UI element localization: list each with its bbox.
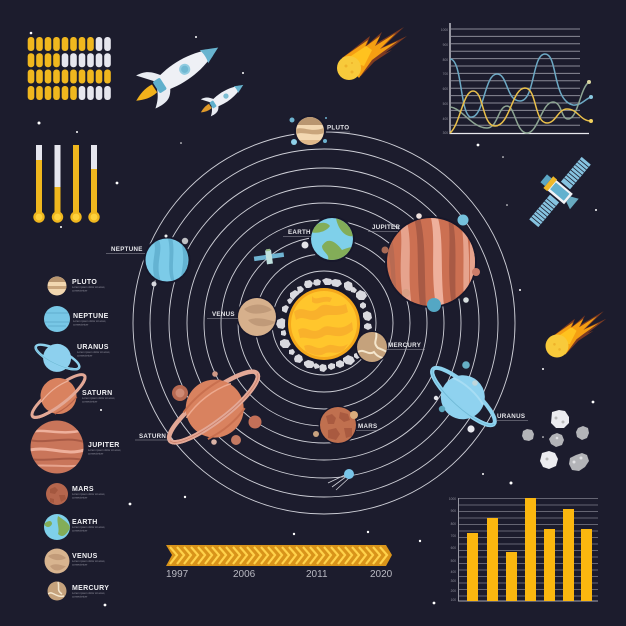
legend: saturn (21, 361, 115, 431)
legend: mars: Lorem ipsum dolor sit amet, (72, 492, 105, 496)
legend: mars: MARS (72, 486, 94, 493)
line chart: 400 (443, 117, 448, 121)
bar chart: 900 (451, 509, 456, 513)
icon: small rocket (195, 76, 248, 120)
line chart: 600 (443, 87, 448, 91)
planet: jupiter (382, 213, 480, 312)
bar chart: 600 (451, 546, 456, 550)
line chart: 1000 (441, 28, 448, 32)
bar chart: 1000 (449, 497, 456, 501)
bar chart: 700 (451, 534, 456, 538)
pictogram grid (28, 37, 111, 100)
line chart: 900 (443, 43, 448, 47)
legend: saturn: consectetuer (82, 400, 97, 404)
legend: venus: VENUS (72, 553, 98, 560)
label: venus (207, 311, 238, 318)
legend: venus: Lorem ipsum dolor sit amet, (72, 559, 105, 563)
timeline years: 2020 (370, 569, 393, 580)
bar chart: 300 (451, 579, 456, 583)
legend: jupiter: JUPITER (88, 442, 120, 449)
line chart: 300 (443, 131, 448, 135)
icon: comet top (337, 27, 407, 80)
legend: mars: consectetuer (72, 496, 87, 500)
legend: venus (44, 548, 105, 574)
label: saturn: SATURN (139, 433, 166, 440)
legend: saturn: Lorem ipsum dolor sit amet, (82, 396, 115, 400)
label: mercury: MERCURY (388, 342, 422, 349)
legend: saturn: SATURN (82, 390, 112, 397)
legend: earth (44, 514, 105, 540)
legend: mercury (48, 582, 109, 600)
label: mars: MARS (358, 423, 377, 430)
legend: uranus: URANUS (77, 344, 109, 351)
label: earth: EARTH (288, 229, 311, 236)
orbits (133, 132, 515, 514)
planet: mercury (356, 330, 388, 364)
planet: earth (302, 216, 355, 262)
asteroid belt (276, 278, 372, 372)
timeline years: 1997 (166, 569, 189, 580)
label: pluto: PLUTO (327, 124, 349, 132)
legend: neptune (44, 306, 109, 332)
planet: neptune (144, 234, 190, 286)
planet: venus (236, 296, 278, 338)
legend: mars (46, 483, 105, 505)
label: jupiter: JUPITER (372, 224, 400, 231)
legend: earth: Lorem ipsum dolor sit amet, (72, 525, 105, 529)
icon: satellite (517, 147, 601, 235)
line chart (441, 23, 593, 135)
timeline years: 2006 (233, 569, 256, 580)
timeline chevron arrow (166, 545, 392, 566)
legend: pluto: PLUTO (72, 279, 97, 286)
legend: venus: consectetuer (72, 562, 87, 566)
timeline years (166, 569, 393, 580)
legend: jupiter (30, 420, 121, 474)
line chart: 700 (443, 72, 448, 76)
timeline years: 2011 (306, 569, 328, 580)
legend: neptune: NEPTUNE (73, 313, 109, 320)
thermometer gauges (33, 145, 100, 223)
icon: comet right (546, 311, 606, 357)
legend: earth: EARTH (72, 519, 98, 526)
satellite: sputnik (328, 469, 354, 490)
legend: pluto: consectetuer (72, 288, 87, 292)
bar chart: 200 (451, 589, 456, 593)
planet: saturn (153, 352, 276, 465)
legend: mercury: consectetuer (72, 594, 87, 598)
icon: large rocket (125, 30, 228, 116)
legend: uranus: consectetuer (77, 354, 92, 358)
line chart: 500 (443, 102, 448, 106)
planet: mars (313, 406, 358, 444)
legend: mercury: MERCURY (72, 585, 109, 592)
legend: neptune: consectetuer (73, 322, 88, 326)
satellite: small (253, 247, 285, 266)
bar chart: 400 (451, 570, 456, 574)
icon: asteroids (522, 410, 589, 471)
legend: uranus (29, 335, 110, 381)
planet: pluto (290, 117, 327, 145)
label: neptune: NEPTUNE (111, 246, 143, 253)
legend: earth: consectetuer (72, 528, 87, 532)
legend: pluto (47, 276, 105, 296)
bar chart: 500 (451, 559, 456, 563)
legend: neptune: Lorem ipsum dolor sit amet, (73, 319, 106, 323)
planet: uranus (418, 353, 508, 441)
legend: pluto: Lorem ipsum dolor sit amet, (72, 285, 105, 289)
bar chart: 800 (451, 522, 456, 526)
label: venus: VENUS (212, 311, 235, 318)
bar chart: 100 (451, 598, 456, 602)
legend: jupiter: Lorem ipsum dolor sit amet, (88, 448, 121, 452)
legend: jupiter: consectetuer (88, 452, 103, 456)
bar chart (449, 497, 598, 602)
line chart: 800 (443, 58, 448, 62)
legend: uranus: Lorem ipsum dolor sit amet, (77, 350, 110, 354)
sun (285, 285, 363, 363)
legend: mercury: Lorem ipsum dolor sit amet, (72, 591, 105, 595)
label: uranus: URANUS (497, 413, 525, 420)
